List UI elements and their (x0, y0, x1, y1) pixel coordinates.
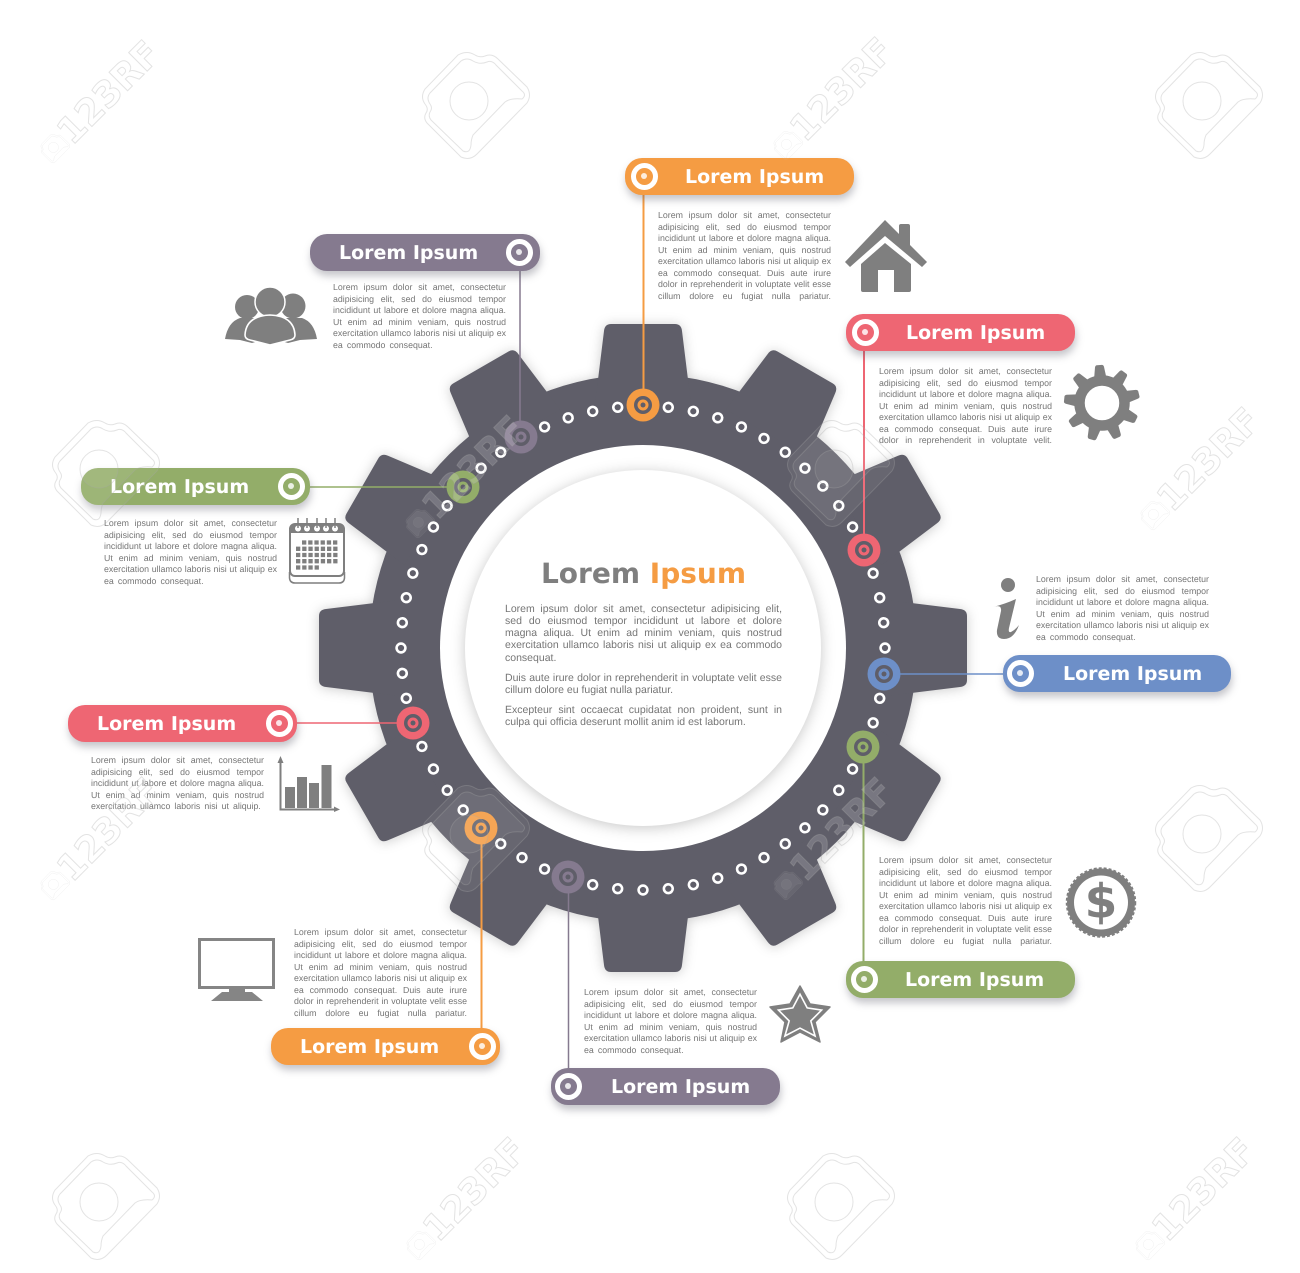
panel: red left callout (65, 705, 302, 811)
central paragraph 3: culpa qui officia deserunt mollit anim id est laborum. (505, 716, 746, 728)
icon: calendar (290, 518, 344, 583)
connector and marker: red right (848, 345, 880, 566)
panel: blue right callout (1000, 574, 1236, 701)
text: red left: incididunt ut labore et dolore magna aliqua. (91, 778, 264, 788)
central paragraph 3 (505, 704, 782, 728)
text: purple bottom: exercitation ullamco laboris nisi ut aliquip ex (584, 1033, 757, 1043)
text: blue right: exercitation ullamco laboris nisi ut aliquip ex (1036, 620, 1209, 630)
text: orange top: ea commodo consequat. Duis aute irure (658, 268, 831, 278)
central text block (505, 557, 782, 728)
watermarks: 123RF (414, 408, 534, 528)
text: orange bottom: Ut enim ad minim veniam, quis nostrud (294, 962, 467, 972)
connector and marker: orange bottom (464, 812, 498, 1035)
text: blue right: Lorem ipsum dolor sit amet, consectetur (1036, 574, 1209, 584)
text: red left: Lorem ipsum dolor sit amet, consectetur (91, 755, 264, 765)
icon: bar chart (278, 756, 340, 812)
label: purple bottom (551, 1068, 780, 1105)
text: orange bottom: cillum dolore eu fugiat nulla pariatur. (294, 1008, 467, 1018)
label: green left: Lorem Ipsum (110, 476, 249, 498)
watermarks: 123RF (415, 1130, 535, 1250)
label: green right (846, 961, 1075, 998)
label: blue right: Lorem Ipsum (1063, 663, 1202, 685)
text: green right: adipisicing elit, sed do eiusmod tempor (879, 867, 1052, 877)
label: orange bottom (271, 1028, 500, 1065)
text: red right: adipisicing elit, sed do eiusmod tempor (879, 378, 1052, 388)
text: green right: cillum dolore eu fugiat nulla pariatur. (879, 936, 1052, 946)
text: red left: Ut enim ad minim veniam, quis nostrud (91, 790, 264, 800)
text: orange top: exercitation ullamco laboris nisi ut aliquip ex (658, 256, 831, 266)
gear body with teeth (319, 324, 967, 972)
label: red right: Lorem Ipsum (906, 322, 1045, 344)
connector and marker: purple top-left (504, 265, 538, 454)
connector and marker: green right (846, 730, 880, 970)
icon: dollar badge (1066, 868, 1136, 937)
panel: purple bottom callout (548, 987, 785, 1114)
icon: monitor (200, 940, 274, 1001)
panel: green right callout (843, 855, 1080, 1007)
text: orange bottom: ea commodo consequat. Duis aute irure (294, 985, 467, 995)
text: orange top: Ut enim ad minim veniam, quis nostrud (658, 245, 831, 255)
connector and marker: red left (285, 706, 430, 740)
text: orange bottom: Lorem ipsum dolor sit amet, consectetur (294, 927, 467, 937)
central paragraph 2: Duis aute irure dolor in reprehenderit in voluptate velit esse (505, 672, 782, 684)
central paragraph 1: magna aliqua. Ut enim ad minim veniam, quis nostrud (505, 627, 782, 639)
label: green right: Lorem Ipsum (905, 969, 1044, 991)
text: green left: incididunt ut labore et dolore magna aliqua. (104, 541, 277, 551)
text: purple top-left: adipisicing elit, sed do eiusmod tempor (333, 294, 506, 304)
text: purple bottom: ea commodo consequat. (584, 1045, 684, 1055)
text: red right: Ut enim ad minim veniam, quis nostrud (879, 401, 1052, 411)
icon: information (993, 578, 1019, 639)
watermarks: 123RF (782, 770, 902, 890)
text: orange top: dolor in reprehenderit in voluptate velit esse (658, 279, 831, 289)
text: red right: ea commodo consequat. Duis aute irure (879, 424, 1052, 434)
panel: red right callout (843, 314, 1080, 445)
label: purple bottom: Lorem Ipsum (611, 1076, 750, 1098)
text: green left: Lorem ipsum dolor sit amet, consectetur (104, 518, 277, 528)
watermarks: 123RF (1144, 1130, 1264, 1250)
text: green right: dolor in reprehenderit in voluptate velit esse (879, 924, 1052, 934)
text: purple bottom: adipisicing elit, sed do eiusmod tempor (584, 999, 757, 1009)
connector and marker: blue right (868, 658, 1010, 690)
text: red right: exercitation ullamco laboris nisi ut aliquip ex (879, 412, 1052, 422)
label: red right (846, 314, 1075, 351)
text: purple bottom (584, 987, 757, 1055)
text: orange bottom: dolor in reprehenderit in voluptate velit esse (294, 996, 467, 1006)
central paragraph 2: cillum dolore eu fugiat nulla pariatur. (505, 684, 673, 696)
icon: star (770, 986, 830, 1042)
text: green left: ea commodo consequat. (104, 576, 204, 586)
icon: dollar badge: $ (1085, 874, 1117, 930)
label: orange top: Lorem Ipsum (685, 166, 824, 188)
text: orange top: adipisicing elit, sed do eiusmod tempor (658, 222, 831, 232)
text: red right (879, 366, 1052, 445)
label: red left (68, 705, 297, 742)
central paragraph 3: Excepteur sint occaecat cupidatat non proident, sunt in (505, 704, 782, 716)
icon: people (225, 287, 317, 345)
text: purple bottom: Ut enim ad minim veniam, quis nostrud (584, 1022, 757, 1032)
watermarks: 123RF (1149, 400, 1269, 520)
connector and marker: green left (300, 470, 480, 504)
text: orange bottom: adipisicing elit, sed do eiusmod tempor (294, 939, 467, 949)
central paragraph 1 (505, 603, 782, 664)
label: purple top-left: Lorem Ipsum (339, 242, 478, 264)
text: blue right: Ut enim ad minim veniam, quis nostrud (1036, 609, 1209, 619)
panel: green left callout (78, 468, 315, 586)
panel: orange bottom callout (268, 927, 505, 1074)
text: purple top-left: incididunt ut labore et dolore magna aliqua. (333, 305, 506, 315)
text: red left: adipisicing elit, sed do eiusmod tempor (91, 767, 264, 777)
text: orange bottom: exercitation ullamco laboris nisi ut aliquip ex (294, 973, 467, 983)
text: green right: exercitation ullamco laboris nisi ut aliquip ex (879, 901, 1052, 911)
text: green right (879, 855, 1052, 946)
text: green right: ea commodo consequat. Duis aute irure (879, 913, 1052, 923)
watermarks: 123RF (49, 770, 169, 890)
text: red left (91, 755, 264, 811)
label: blue right (1003, 655, 1231, 692)
text: blue right: adipisicing elit, sed do eiusmod tempor (1036, 586, 1209, 596)
text: purple top-left: ea commodo consequat. (333, 340, 433, 350)
text: red right: incididunt ut labore et dolore magna aliqua. (879, 389, 1052, 399)
text: purple top-left (333, 282, 506, 350)
dotted track (397, 402, 889, 894)
label: orange bottom: Lorem Ipsum (300, 1036, 439, 1058)
panel: purple top-left callout (307, 234, 545, 350)
central paragraph 1: consequat. (505, 652, 556, 664)
text: red right: dolor in reprehenderit in voluptate velit. (879, 435, 1052, 445)
text: blue right (1036, 574, 1209, 642)
text: green right: Lorem ipsum dolor sit amet, consectetur (879, 855, 1052, 865)
label: green left (81, 468, 310, 505)
panel: orange top callout (622, 158, 859, 301)
central paragraph 1: exercitation ullamco laboris nisi ut aliquip ex ea commodo (505, 639, 782, 651)
text: orange bottom (294, 927, 467, 1018)
text: purple top-left: Lorem ipsum dolor sit amet, consectetur (333, 282, 506, 292)
label: purple top-left (310, 234, 540, 271)
text: orange bottom: incididunt ut labore et dolore magna aliqua. (294, 950, 467, 960)
connector and marker: purple bottom (552, 860, 584, 1075)
text: green left: exercitation ullamco laboris nisi ut aliquip ex (104, 564, 277, 574)
text: purple top-left: exercitation ullamco laboris nisi ut aliquip ex (333, 328, 506, 338)
text: green right: incididunt ut labore et dolore magna aliqua. (879, 878, 1052, 888)
central disc (465, 470, 821, 826)
central white ring (440, 445, 846, 851)
text: blue right: incididunt ut labore et dolore magna aliqua. (1036, 597, 1209, 607)
text: green left: adipisicing elit, sed do eiusmod tempor (104, 530, 277, 540)
watermarks: 123RF (782, 30, 902, 150)
text: green right: Ut enim ad minim veniam, quis nostrud (879, 890, 1052, 900)
text: green left (104, 518, 277, 586)
central paragraph 1: Lorem ipsum dolor sit amet, consectetur adipisicing elit, (505, 603, 782, 615)
connector and marker: orange top (626, 190, 660, 422)
text: purple bottom: Lorem ipsum dolor sit amet, consectetur (584, 987, 757, 997)
text: red right: Lorem ipsum dolor sit amet, consectetur (879, 366, 1052, 376)
icon: settings gear (1064, 365, 1140, 441)
text: orange top (658, 210, 831, 301)
icon: house (845, 220, 927, 292)
central paragraph 1: sed do eiusmod tempor incididunt ut labore et dolore (505, 615, 782, 627)
label: red left: Lorem Ipsum (97, 713, 236, 735)
watermarks: 123RF (49, 33, 169, 153)
text: purple bottom: incididunt ut labore et dolore magna aliqua. (584, 1010, 757, 1020)
text: orange top: incididunt ut labore et dolore magna aliqua. (658, 233, 831, 243)
text: blue right: ea commodo consequat. (1036, 632, 1136, 642)
text: purple top-left: Ut enim ad minim veniam, quis nostrud (333, 317, 506, 327)
central paragraph 2 (505, 672, 782, 696)
text: orange top: Lorem ipsum dolor sit amet, consectetur (658, 210, 831, 220)
central heading: Lorem Ipsum (541, 557, 746, 590)
label: orange top (625, 158, 854, 195)
text: red left: exercitation ullamco laboris nisi ut aliquip. (91, 801, 261, 811)
text: green left: Ut enim ad minim veniam, quis nostrud (104, 553, 277, 563)
text: orange top: cillum dolore eu fugiat nulla pariatur. (658, 291, 831, 301)
